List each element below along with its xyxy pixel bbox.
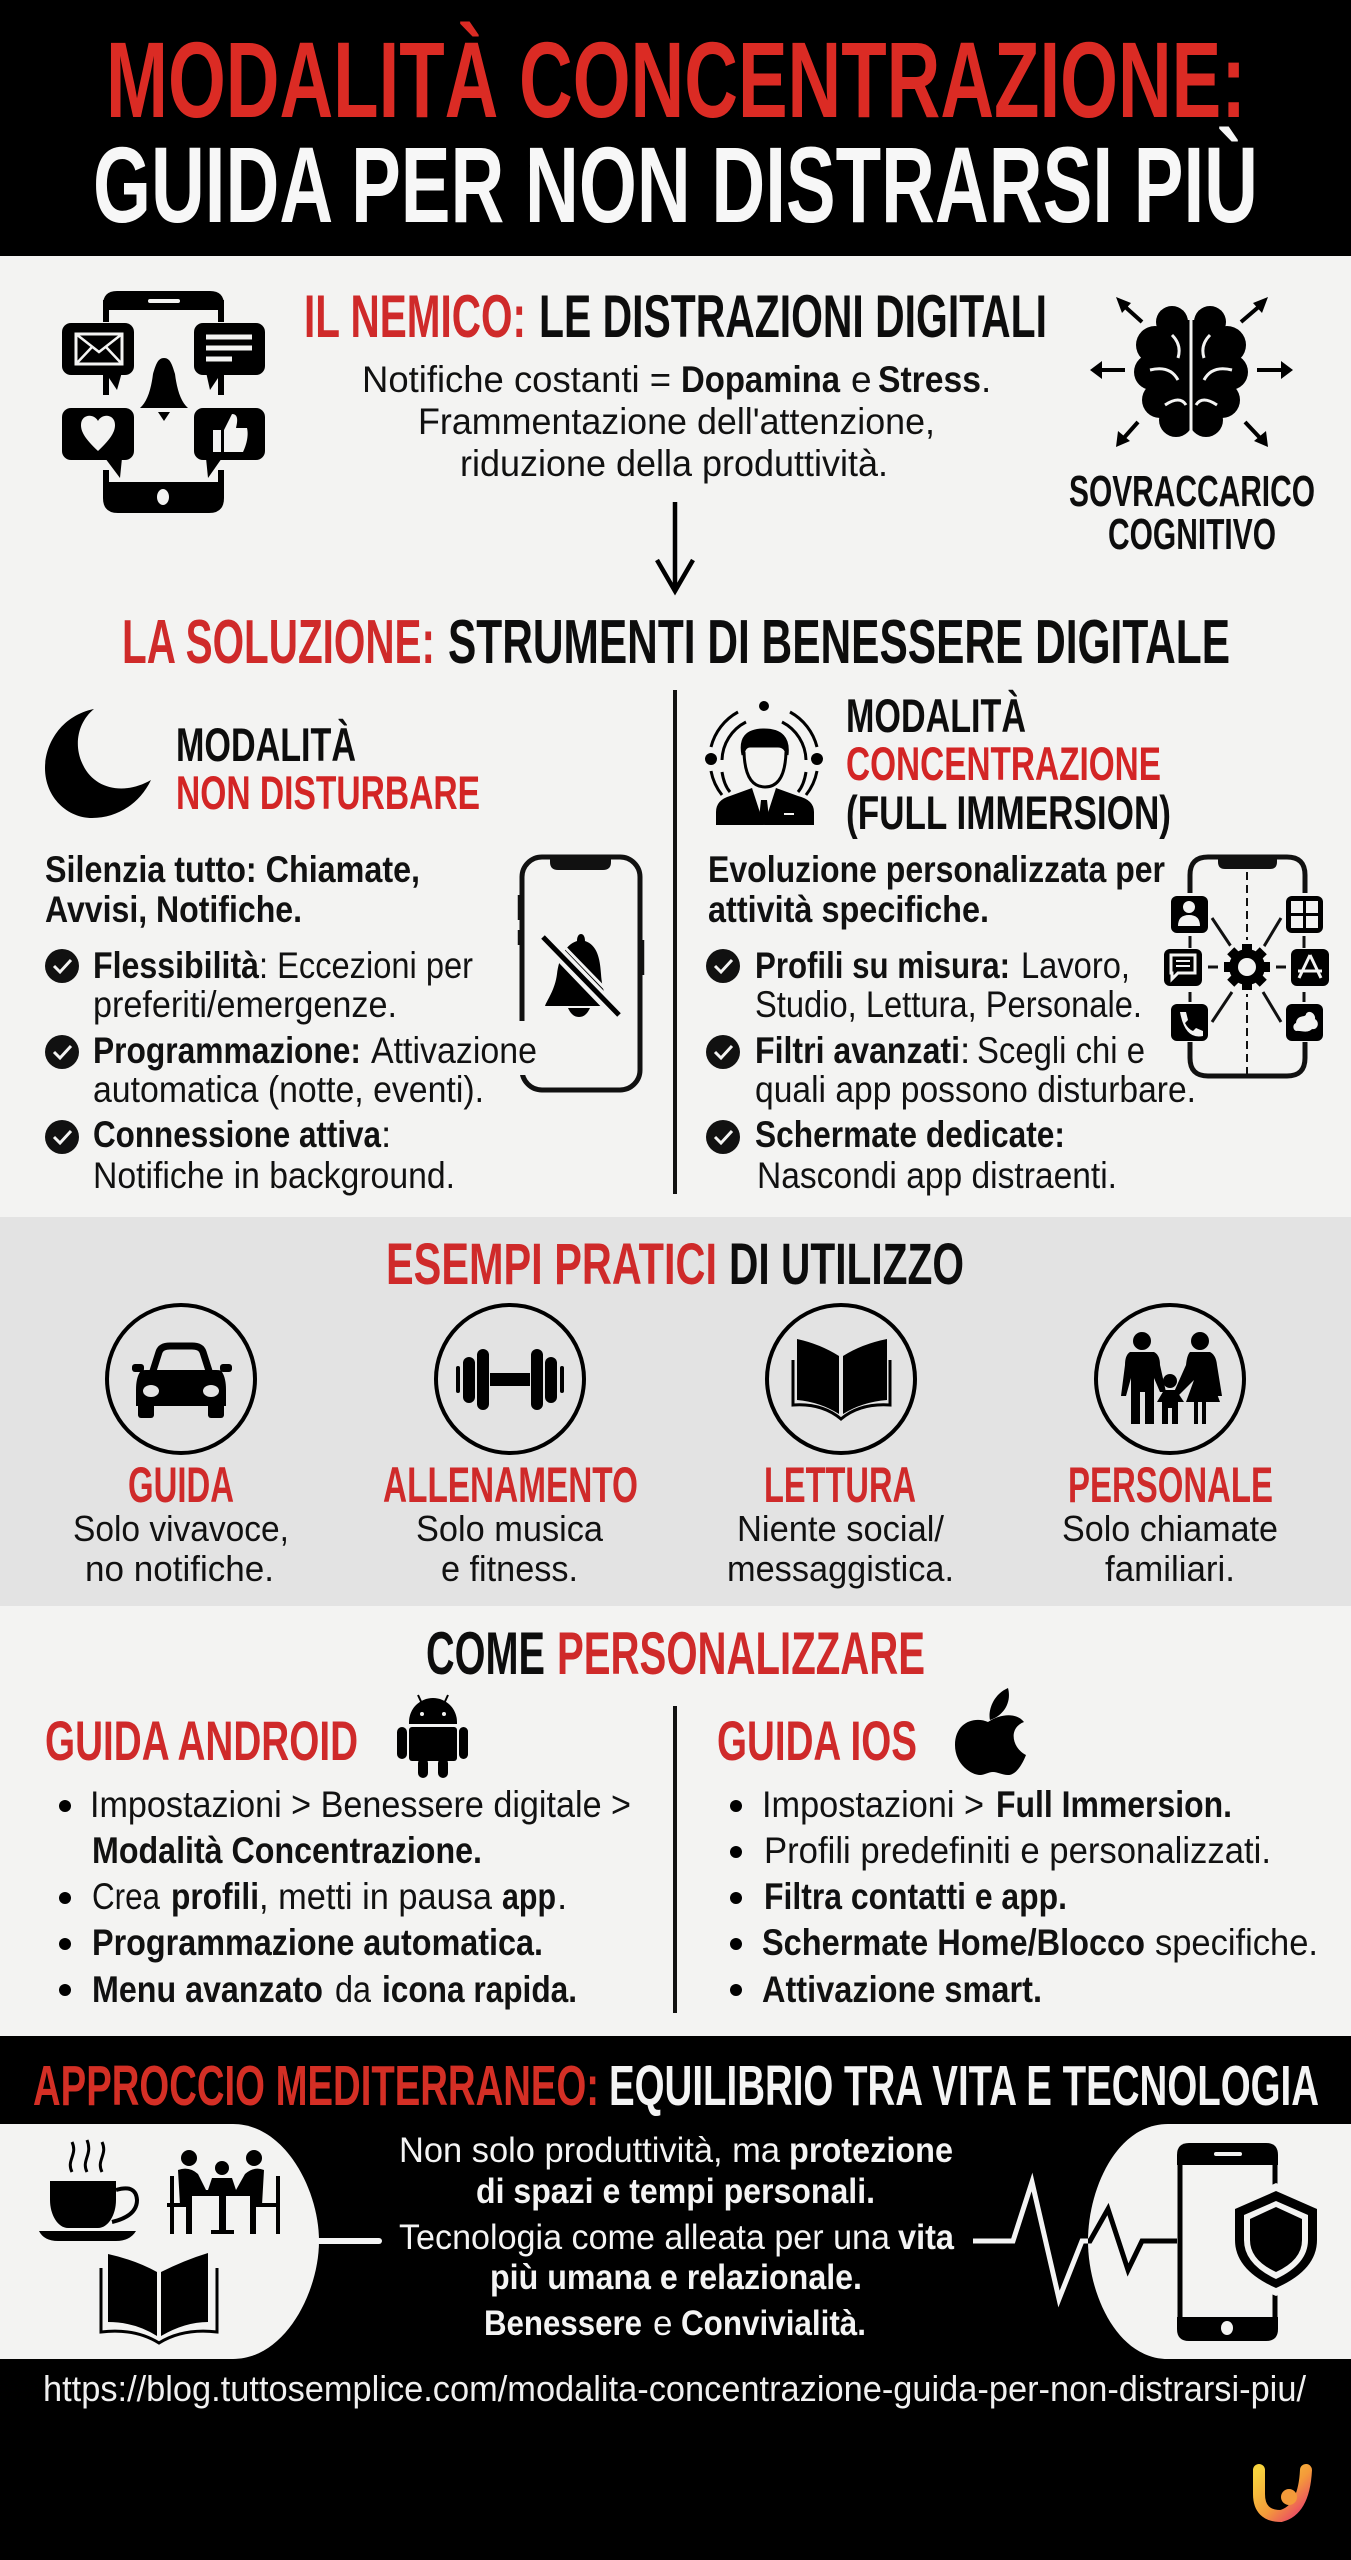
- heading: il nemico: IL NEMICO:: [304, 283, 526, 350]
- heading: guida ios: GUIDA IOS: [717, 1709, 917, 1772]
- example: guida: no notifiche.: [85, 1548, 274, 1589]
- text: silenzia tutto: Avvisi, Notifiche.: [45, 889, 302, 930]
- example: lettura: messaggistica.: [727, 1548, 954, 1589]
- bullet: profili su misura: Studio, Lettura, Personale.: [755, 984, 1142, 1025]
- heading: la soluzione: LA SOLUZIONE:: [122, 608, 435, 677]
- column divider: [673, 690, 677, 1194]
- text: enemy description: riduzione della produttività.: [460, 443, 888, 484]
- example: personale: [1062, 1305, 1278, 1589]
- bullet: programmazione: Programmazione:: [93, 1030, 361, 1071]
- label: sovraccarico cognitivo: [1069, 467, 1315, 559]
- heading: approccio mediterraneo: APPROCCIO MEDITERRANEO:: [33, 2054, 599, 2118]
- icon: moon: [45, 709, 151, 818]
- list: android steps: .: [557, 1876, 567, 1917]
- icon: phone with app profile hub: [1164, 857, 1329, 1076]
- text: enemy description: Frammentazione dell'attenzione,: [418, 401, 935, 442]
- list: ios steps: Attivazione smart.: [762, 1969, 1042, 2010]
- list: android steps: da: [335, 1969, 371, 2010]
- icon: shield: [1227, 2183, 1325, 2296]
- heading: modalità non disturbare: NON DISTURBARE: [176, 766, 480, 819]
- list: android steps: Modalità Concentrazione.: [92, 1830, 482, 1871]
- heading: modalità concentrazione full immersion: [846, 689, 1171, 839]
- heading: modalità concentrazione full immersion: CONCENTRAZIONE: [846, 737, 1161, 790]
- text: mediterranean description: Benessere: [484, 2304, 642, 2343]
- text: evoluzione personalizzata: attività specifiche.: [708, 889, 989, 930]
- logo: [1259, 2470, 1306, 2516]
- example: lettura: Niente social/: [737, 1508, 944, 1549]
- panel: technology icons: [1088, 2124, 1351, 2359]
- list: android steps: , metti in pausa: [259, 1876, 492, 1917]
- bullet: filtri avanzati: Filtri avanzati: [755, 1030, 960, 1071]
- panel: non disturbare: [45, 709, 643, 1196]
- panel: concentrazione: [705, 689, 1329, 1196]
- bullet: programmazione: [45, 1030, 537, 1110]
- icon: phone: [1177, 2143, 1278, 2341]
- text: mediterranean description: e: [653, 2304, 672, 2343]
- text: evoluzione personalizzata: Evoluzione personalizzata per: [708, 849, 1165, 890]
- text: silenzia tutto: [45, 849, 420, 930]
- panel: esempi pratici: [0, 1217, 1351, 1606]
- list: ios steps: Schermate Home/Blocco: [762, 1922, 1145, 1963]
- heading: guida android: GUIDA ANDROID: [45, 1709, 358, 1772]
- text: mediterranean description: vita: [898, 2218, 954, 2257]
- bullet: profili su misura: Lavoro,: [1021, 945, 1130, 986]
- text: enemy description: .: [981, 359, 991, 400]
- list: ios steps: Full Immersion.: [996, 1784, 1232, 1825]
- icon: book: [101, 2253, 217, 2343]
- list: ios steps: [730, 1784, 1318, 2010]
- heading: come personalizzare: [426, 1620, 925, 1687]
- icon: dumbbell: [436, 1305, 584, 1453]
- icon: phone with muted bell: [516, 857, 643, 1090]
- panel: il nemico and la soluzione: [0, 256, 1351, 1217]
- example: lettura: [727, 1305, 954, 1589]
- heading: approccio mediterraneo: [33, 2054, 1319, 2118]
- bullet: filtri avanzati: :: [960, 1030, 970, 1071]
- example: personale: familiari.: [1105, 1548, 1235, 1589]
- heading: il nemico: LE DISTRAZIONI DIGITALI: [539, 283, 1047, 350]
- example: personale: Solo chiamate: [1062, 1508, 1278, 1549]
- bullet: filtri avanzati: [706, 1030, 1196, 1110]
- text: mediterranean description: [399, 2131, 954, 2343]
- bullet: flessibilità: [45, 945, 473, 1025]
- heading: il nemico: [304, 283, 1047, 350]
- icon: apple: [955, 1688, 1026, 1775]
- bullet: programmazione: automatica (notte, eventi).: [93, 1069, 484, 1110]
- column: guida ios: [717, 1688, 1318, 2010]
- bullet: schermate dedicate: Schermate dedicate:: [755, 1114, 1065, 1155]
- title banner: [0, 0, 1351, 256]
- bullet: schermate dedicate: [706, 1114, 1117, 1196]
- icon: brain with arrows: [1090, 297, 1293, 447]
- text: enemy description: Stress: [878, 359, 981, 400]
- list: android steps: Menu avanzato: [92, 1969, 323, 2010]
- icon: people at table: [167, 2150, 280, 2234]
- bullet: profili su misura: [706, 945, 1142, 1025]
- bullet: flessibilità: : Eccezioni per: [259, 945, 473, 986]
- example: lettura: LETTURA: [764, 1457, 916, 1513]
- heading: modalità non disturbare: MODALITÀ: [176, 718, 356, 771]
- bullet: flessibilità: Flessibilità: [93, 945, 259, 986]
- text: enemy description: e: [851, 359, 872, 400]
- list: android steps: Programmazione automatica.: [92, 1922, 543, 1963]
- icon: heartbeat line: [973, 2182, 1177, 2299]
- bullet: connessione attiva: Connessione attiva: [93, 1114, 381, 1155]
- heading: come personalizzare: COME: [426, 1620, 545, 1687]
- example: guida: [73, 1305, 289, 1589]
- icon: android: [397, 1695, 468, 1778]
- label: sovraccarico cognitivo: COGNITIVO: [1108, 510, 1276, 559]
- example: allenamento: Solo musica: [416, 1508, 604, 1549]
- icon: phone with notifications: [62, 291, 265, 513]
- example: allenamento: e fitness.: [441, 1548, 578, 1589]
- bullet: filtri avanzati: quali app possono disturbare.: [755, 1069, 1196, 1110]
- text: silenzia tutto: Silenzia tutto: Chiamate,: [45, 849, 420, 890]
- list: ios steps: Filtra contatti e app.: [764, 1876, 1067, 1917]
- text: enemy description: [362, 359, 991, 484]
- bullet: schermate dedicate: Nascondi app distraenti.: [757, 1155, 1117, 1196]
- example: allenamento: [383, 1305, 638, 1589]
- panel: approccio mediterraneo: [0, 2036, 1351, 2560]
- text: evoluzione personalizzata: [708, 849, 1165, 930]
- icon: family: [1096, 1305, 1244, 1453]
- text: mediterranean description: Non solo produttività, ma: [399, 2131, 781, 2170]
- bullet: connessione attiva: [45, 1114, 455, 1196]
- arrow: down: [657, 502, 693, 591]
- icon: car: [107, 1305, 255, 1453]
- text: mediterranean description: Convivialità.: [681, 2304, 866, 2343]
- example: allenamento: ALLENAMENTO: [383, 1457, 638, 1513]
- column: guida android: [45, 1695, 631, 2010]
- heading: come personalizzare: PERSONALIZZARE: [557, 1620, 925, 1687]
- example: guida: Solo vivavoce,: [73, 1508, 289, 1549]
- list: ios steps: specifiche.: [1155, 1922, 1318, 1963]
- bullet: connessione attiva: :: [381, 1114, 391, 1155]
- list: ios steps: Profili predefiniti e personalizzati.: [764, 1830, 1271, 1871]
- list: android steps: [59, 1784, 631, 2010]
- icon: focused person: [705, 701, 823, 825]
- heading: modalità concentrazione full immersion: (FULL IMMERSION): [846, 786, 1171, 839]
- heading: esempi pratici: DI UTILIZZO: [729, 1232, 964, 1297]
- list: ios steps: Impostazioni >: [762, 1784, 984, 1825]
- list: android steps: profili: [171, 1876, 259, 1917]
- connector line left: [319, 2238, 379, 2244]
- panel: come personalizzare: [0, 1606, 1351, 2036]
- icon: coffee: [39, 2140, 137, 2241]
- heading: modalità concentrazione full immersion: MODALITÀ: [846, 689, 1026, 742]
- heading: modalità non disturbare: [176, 718, 480, 819]
- panel: life icons: [0, 2124, 319, 2359]
- text: mediterranean description: di spazi e tempi personali.: [476, 2172, 875, 2211]
- list: android steps: app: [502, 1876, 556, 1917]
- bullet: programmazione: Attivazione: [371, 1030, 537, 1071]
- text: mediterranean description: protezione: [789, 2131, 953, 2170]
- bullet: profili su misura: Profili su misura:: [755, 945, 1010, 986]
- text: mediterranean description: più umana e relazionale.: [490, 2258, 862, 2297]
- list: android steps: Impostazioni > Benessere digitale >: [90, 1784, 631, 1825]
- bullet: connessione attiva: Notifiche in background.: [93, 1155, 455, 1196]
- text: enemy description: Dopamina: [681, 359, 840, 400]
- text: enemy description: Notifiche costanti =: [362, 359, 671, 400]
- bullet: filtri avanzati: Scegli chi e: [977, 1030, 1145, 1071]
- bullet: flessibilità: preferiti/emergenze.: [93, 984, 397, 1025]
- heading: la soluzione: [122, 608, 1230, 677]
- source url: https://blog.tuttosemplice.com/modalita-concentrazione-guida-per-non-distrarsi-piu/: [43, 2368, 1306, 2409]
- list: android steps: Crea: [92, 1876, 160, 1917]
- list: android steps: icona rapida.: [382, 1969, 577, 2010]
- example: guida: GUIDA: [128, 1457, 234, 1513]
- icon: open book: [767, 1305, 915, 1453]
- text: mediterranean description: Tecnologia come alleata per una: [399, 2218, 891, 2257]
- heading: esempi pratici: ESEMPI PRATICI: [386, 1232, 717, 1297]
